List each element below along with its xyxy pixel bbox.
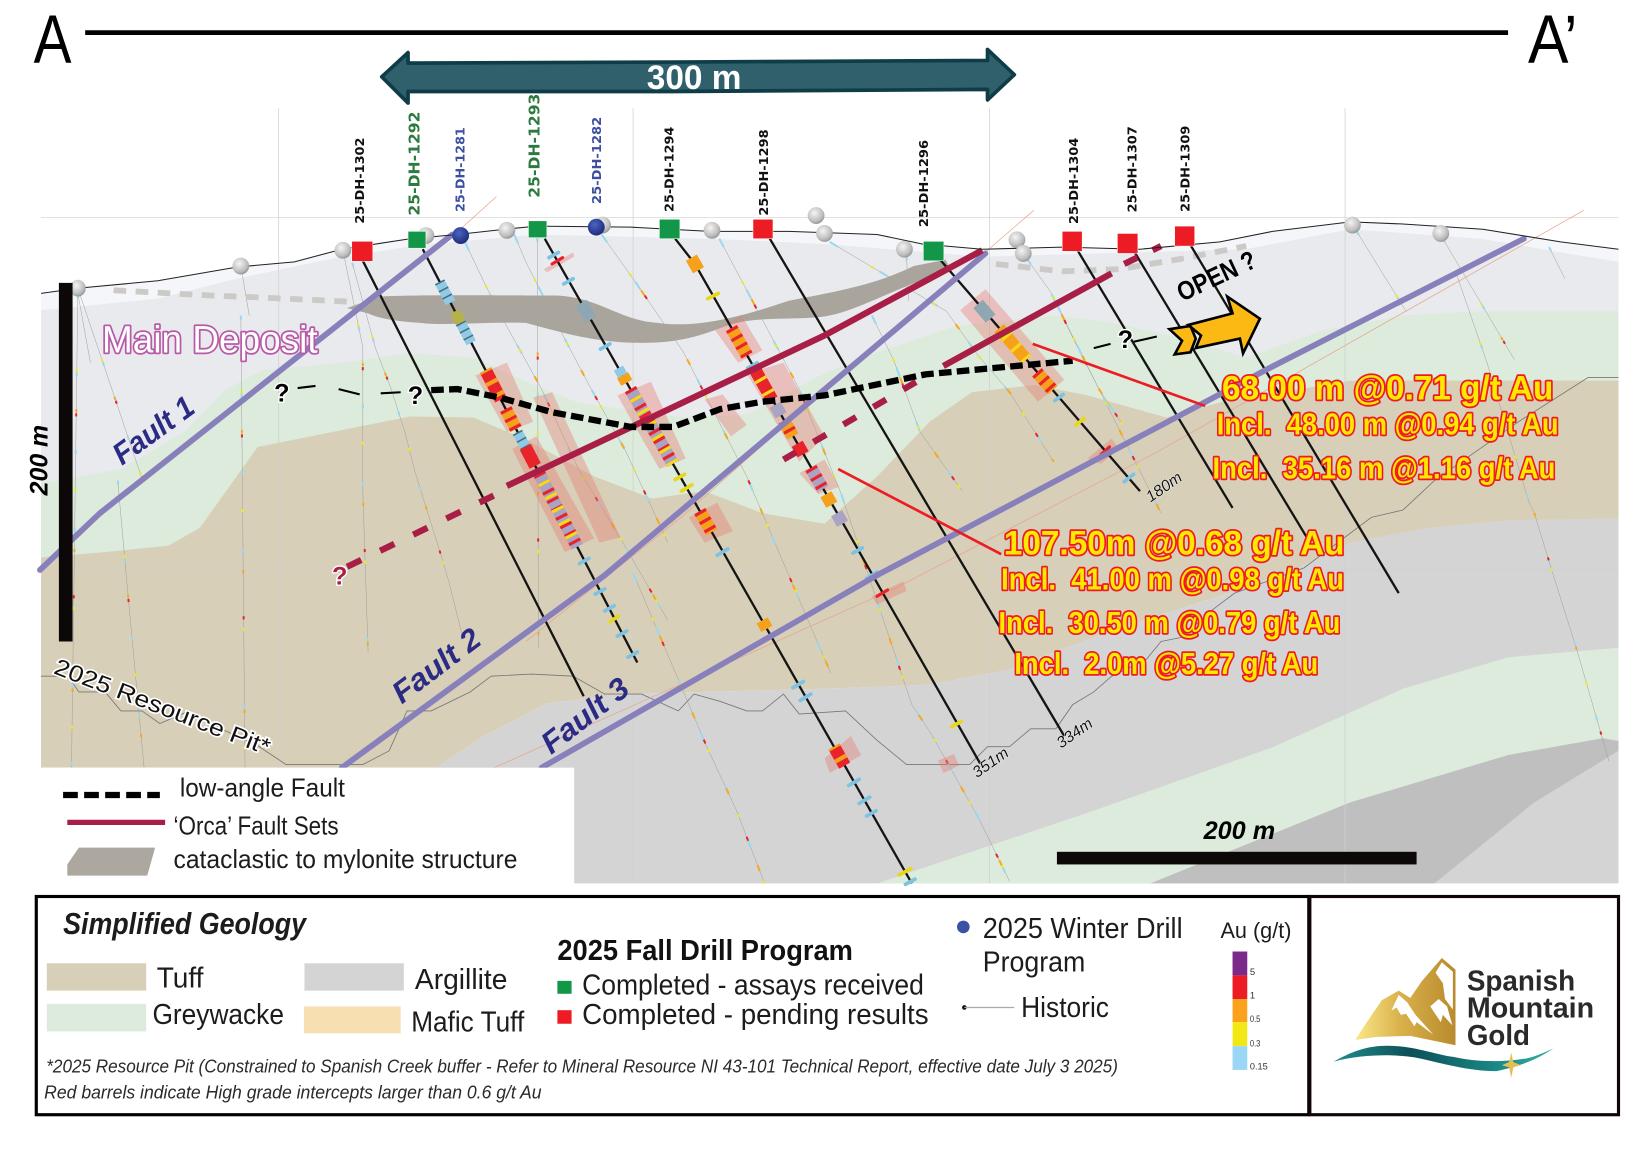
historic drill holes with assay speckles — [72, 231, 1609, 883]
callout: 107.50 m intercept: 107.50m @0.68 g/t Au — [1004, 525, 1345, 563]
panel: map legend box — [36, 897, 1309, 1115]
query marks on faults: ? — [274, 380, 290, 408]
argillite swatch — [304, 963, 404, 991]
drill hole labels — [353, 94, 1192, 227]
winter drill program label: 2025 Winter Drill — [983, 913, 1183, 945]
gold grade scale: 1 — [1250, 991, 1255, 1002]
argillite label: Argillite — [415, 964, 507, 996]
drill hole trace 25-DH-1307 — [1135, 252, 1309, 542]
layer: greywacke upper band — [41, 311, 1619, 589]
depth label 351m: 351m — [970, 745, 1012, 781]
query marks on faults: ? — [332, 563, 347, 591]
mafic tuff swatch — [304, 1006, 401, 1033]
winter program collars — [452, 219, 605, 244]
drill hole labels: 25-DH-1298 — [757, 129, 771, 216]
gold grade scale: 0.15 — [1250, 1061, 1268, 1072]
drill hole labels: 25-DH-1294 — [663, 127, 677, 212]
drill hole labels: 25-DH-1293 — [527, 94, 544, 198]
low-angle fault label: low-angle Fault — [180, 773, 346, 803]
drill hole 25-DH-1292 with intervals — [423, 249, 637, 663]
winter drill program label: Program — [983, 947, 1085, 979]
drill hole labels: 25-DH-1296 — [917, 140, 931, 227]
open-ended yellow arrow — [1169, 297, 1260, 354]
drill hole labels: 25-DH-1307 — [1125, 126, 1139, 212]
300 m scale arrow: 300 m — [647, 59, 741, 97]
callout: 107.50 m intercept — [999, 525, 1345, 681]
drill hole labels: 25-DH-1292 — [407, 111, 424, 216]
drill hole trace 25-DH-1309 — [1190, 245, 1399, 593]
callout: 107.50 m intercept: Incl. 2.0m @5.27 g/t Au — [1014, 647, 1318, 681]
gold grade scale: 5 — [1250, 967, 1255, 978]
logo wave icon — [1334, 1046, 1553, 1071]
cataclastic label: cataclastic to mylonite structure — [174, 844, 517, 874]
callout: 68.00 m intercept: Incl. 35.16 m @1.16 g/t Au — [1213, 451, 1555, 485]
tuff swatch — [47, 963, 146, 991]
layer: overburden strip — [41, 222, 1619, 421]
drill hole labels: 25-DH-1281 — [453, 127, 467, 212]
logo wordmark: Mountain — [1467, 993, 1594, 1025]
vertical scale bar — [59, 283, 73, 641]
logo star icon — [1502, 1053, 1521, 1078]
pale dashed structure extensions — [114, 246, 1246, 302]
drill hole 25-DH-1293 with intervals — [545, 239, 915, 884]
label: 2025 Resource Pit: 2025 Resource Pit* — [51, 653, 274, 760]
mafic tuff label: Mafic Tuff — [411, 1006, 524, 1038]
layer: greywacke lower band — [877, 648, 1619, 883]
logo mountain icon — [1355, 958, 1455, 1045]
2025 resource pit outline — [41, 378, 1619, 765]
horizontal scale label 200 m: 200 m — [1203, 817, 1275, 845]
logo wordmark — [1467, 966, 1594, 1052]
vertical scale label 200 m: 200 m — [25, 425, 53, 496]
drill hole labels: 25-DH-1282 — [590, 117, 604, 204]
grid lines — [41, 108, 1619, 883]
assays received label: Completed - assays received — [582, 970, 924, 1002]
callout: 68.00 m intercept — [1213, 370, 1559, 485]
logo wordmark: Gold — [1467, 1020, 1530, 1052]
panel: structure legend — [41, 768, 574, 885]
drill hole trace 25-DH-1304 — [1077, 249, 1233, 508]
assays received collars — [408, 219, 944, 261]
footnote: Red barrels indicate High grade intercepts larger than 0.6 g/t Au — [44, 1083, 542, 1104]
heading: 2025 Fall Drill Program: 2025 Fall Drill Program — [557, 935, 853, 967]
horizontal scale bar — [1057, 852, 1417, 864]
cataclastic to mylonite structure band — [347, 260, 952, 343]
footnote: *2025 Resource Pit (Constrained to Spanish Creek buffer - Refer to Mineral Resource NI 43-101 Technical Report, effective date July 3 2025) — [46, 1057, 1118, 1078]
section line A to A' — [85, 30, 1508, 35]
layer: argillite — [436, 518, 1619, 883]
drill hole 25-DH-1296 with intervals — [940, 260, 1140, 491]
drill hole trace 25-DH-1302 — [363, 261, 584, 696]
layer: dark argillite — [1151, 738, 1619, 883]
footnote — [44, 1057, 1118, 1104]
orca fault set two — [783, 246, 1161, 460]
query marks on faults: ? — [408, 382, 423, 410]
greywacke label: Greywacke — [152, 999, 284, 1031]
historic marker — [962, 1005, 1014, 1010]
section title letter A prime: A’ — [1528, 2, 1577, 78]
low-angle fault heavy dashed trace — [431, 361, 1073, 427]
label: Fault 1: Fault 1 — [106, 390, 201, 472]
label: Fault 2: Fault 2 — [385, 622, 487, 710]
orca fault label: ‘Orca’ Fault Sets — [174, 811, 339, 841]
low-angle fault thin dashed extensions — [298, 337, 1157, 394]
drill hole labels: 25-DH-1302 — [353, 137, 367, 224]
cataclastic swatch — [67, 848, 155, 876]
panel: logo box — [1310, 897, 1619, 1115]
fault 1 trace — [40, 235, 452, 570]
fault 2 trace — [342, 253, 985, 768]
winter drill program label — [983, 913, 1183, 979]
winter drill marker — [957, 921, 970, 933]
OPEN question label: OPEN ? — [1172, 245, 1261, 307]
tuff label: Tuff — [157, 962, 204, 994]
surface topography line — [41, 222, 1619, 293]
historic collar spheres — [70, 207, 1449, 297]
label: Main Deposit: Main Deposit — [102, 319, 318, 361]
pending results label: Completed - pending results — [582, 999, 929, 1031]
panel: geological cross-section — [40, 108, 1619, 884]
gold grade scale — [1220, 918, 1291, 1072]
drill hole 25-DH-1294 with intervals — [675, 239, 980, 763]
greywacke swatch — [47, 1004, 146, 1031]
pending results collars — [352, 219, 1195, 261]
query marks on faults: ? — [1118, 326, 1133, 354]
red pending marker — [557, 1010, 572, 1024]
gold grade scale: 0.3 — [1250, 1038, 1260, 1049]
green assays marker — [557, 981, 572, 994]
fault 3 trace — [542, 239, 1524, 768]
orca fault set one — [347, 250, 982, 567]
orca fault swatch — [67, 820, 165, 825]
callout: 68.00 m intercept: Incl. 48.00 m @0.94 g/t Au — [1217, 407, 1559, 441]
depth label 180m: 180m — [1143, 469, 1186, 506]
high grade intercept envelopes — [475, 252, 1119, 773]
depth label 334m: 334m — [1054, 715, 1096, 752]
thin red structure traces — [452, 197, 1584, 768]
callout: 68.00 m intercept: 68.00 m @0.71 g/t Au — [1222, 370, 1553, 408]
low-angle fault swatch — [63, 792, 160, 798]
historic label: Historic — [1021, 992, 1109, 1024]
query marks on faults — [274, 326, 1133, 591]
drill hole labels: 25-DH-1309 — [1178, 126, 1192, 212]
callout: 107.50 m intercept: Incl. 30.50 m @0.79 g/t Au — [999, 606, 1340, 640]
drill hole trace 25-DH-1298 — [770, 239, 1064, 736]
drill hole labels: 25-DH-1304 — [1067, 138, 1081, 224]
heading: Simplified Geology: Simplified Geology — [63, 907, 308, 941]
layer: upper grey unit — [41, 229, 1619, 526]
red callout leader lines — [838, 344, 1205, 554]
layer: tuff — [41, 381, 1619, 768]
callout: 107.50 m intercept: Incl. 41.00 m @0.98 g/t Au — [1001, 563, 1344, 597]
gold grade scale: 0.5 — [1250, 1014, 1260, 1025]
gold grade scale: Au (g/t) — [1220, 918, 1291, 943]
section title letter A: A — [34, 2, 72, 78]
300 m scale arrow — [382, 49, 1014, 103]
label: Fault 3: Fault 3 — [534, 671, 636, 761]
logo wordmark: Spanish — [1467, 966, 1575, 998]
